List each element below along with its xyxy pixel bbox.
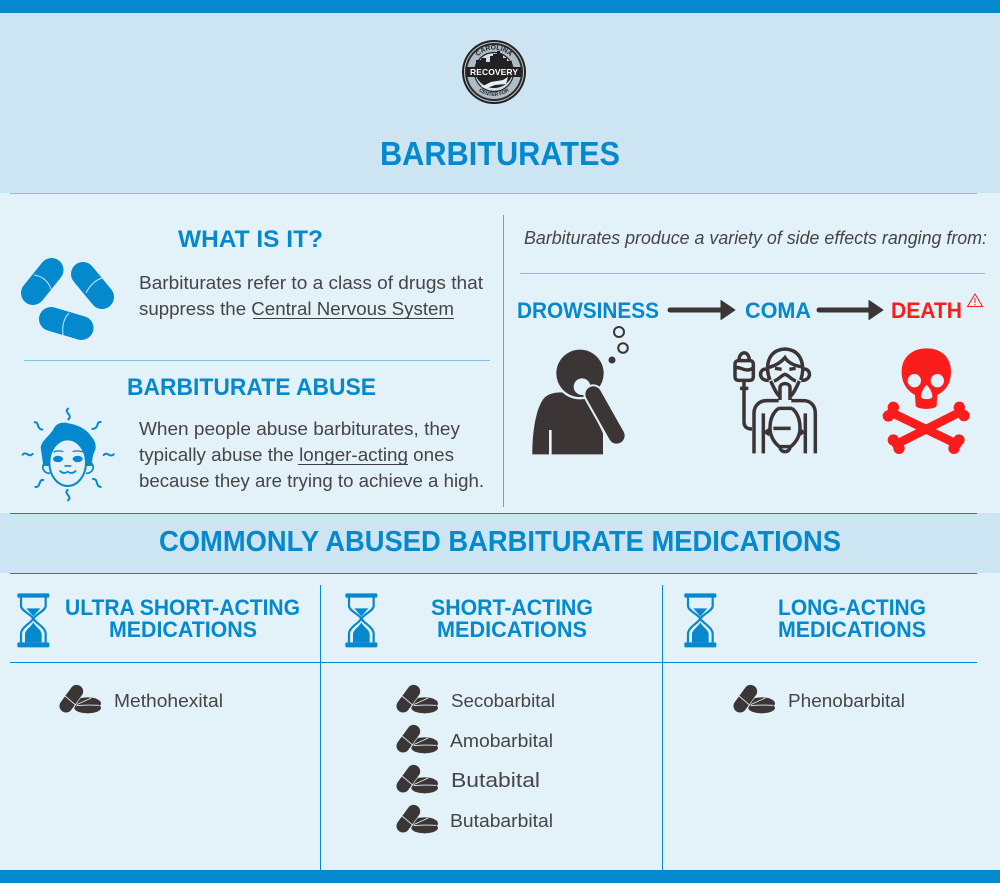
heading: short-acting medications: SHORT-ACTING <box>431 595 593 620</box>
icon: agitated face <box>23 409 114 500</box>
title: BARBITURATES <box>380 135 620 172</box>
icon: hourglass <box>345 593 377 647</box>
label: drowsiness: DROWSINESS <box>517 298 659 323</box>
item: butabarbital <box>402 810 553 833</box>
heading: long-acting medications: MEDICATIONS <box>778 617 926 642</box>
arrow: drowsiness to coma <box>670 300 735 320</box>
text: definition <box>139 272 483 319</box>
item: secobarbital: Secobarbital <box>451 690 555 711</box>
icon: drowsy person <box>532 327 628 454</box>
icon: patient on oxygen <box>735 349 815 453</box>
text: side effects intro: Barbiturates produce a variety of side effects ranging from: <box>524 227 987 248</box>
top bar <box>0 0 1000 13</box>
icon: hourglass <box>17 593 49 647</box>
logo: Carolina Recovery Center <box>462 40 526 104</box>
logo: Carolina Recovery Center: RECOVERY <box>470 67 518 77</box>
label: coma: COMA <box>745 298 811 323</box>
heading: ultra short-acting medications <box>65 595 300 642</box>
icon: capsules <box>33 270 102 335</box>
icon: warning triangle <box>968 294 982 306</box>
item: butabital <box>402 770 540 793</box>
item: butabital: Butabital <box>451 770 540 792</box>
item: methohexital: Methohexital <box>114 690 223 711</box>
heading: long-acting medications <box>778 595 926 642</box>
heading: long-acting medications: LONG-ACTING <box>778 595 926 620</box>
column: long-acting <box>684 593 926 713</box>
arrow: coma to death <box>819 300 883 320</box>
panel: barbiturate abuse <box>23 374 484 500</box>
item: secobarbital <box>402 690 555 713</box>
item: phenobarbital: Phenobarbital <box>788 690 905 711</box>
logo: Carolina Recovery Center: CENTER FOR <box>480 88 509 96</box>
header band <box>0 13 1000 193</box>
text: abuse description: typically abuse the longer-acting ones <box>139 444 454 465</box>
column: ultra short-acting <box>17 593 300 713</box>
heading: short-acting medications: MEDICATIONS <box>437 617 587 642</box>
text: definition: suppress the Central Nervous System <box>139 298 454 319</box>
item: methohexital <box>65 690 223 713</box>
heading: short-acting medications <box>431 595 593 642</box>
heading: what is it: WHAT IS IT? <box>178 226 323 253</box>
section band: commonly abused <box>0 513 1000 574</box>
column: short-acting <box>345 593 593 833</box>
text: abuse description: because they are trying to achieve a high. <box>139 470 484 491</box>
heading: barbiturate abuse: BARBITURATE ABUSE <box>127 374 376 401</box>
text: definition: Barbiturates refer to a class of drugs that <box>139 272 483 293</box>
logo: Carolina Recovery Center: CAROLINA <box>476 45 512 56</box>
icon: hourglass <box>684 593 716 647</box>
text: abuse description <box>139 418 484 491</box>
icon: skull and crossbones <box>883 348 970 454</box>
bottom bar <box>0 870 1000 883</box>
item: amobarbital <box>402 730 553 753</box>
panel: what is it <box>33 226 483 335</box>
label: death: DEATH <box>891 298 962 323</box>
text: abuse description: When people abuse barbiturates, they <box>139 418 461 439</box>
section heading: COMMONLY ABUSED BARBITURATE MEDICATIONS <box>159 526 841 558</box>
item: amobarbital: Amobarbital <box>450 730 553 751</box>
item: butabarbital: Butabarbital <box>450 810 553 831</box>
heading: ultra short-acting medications: ULTRA SHORT-ACTING <box>65 595 300 620</box>
heading: ultra short-acting medications: MEDICATIONS <box>109 617 257 642</box>
item: phenobarbital <box>739 690 905 713</box>
